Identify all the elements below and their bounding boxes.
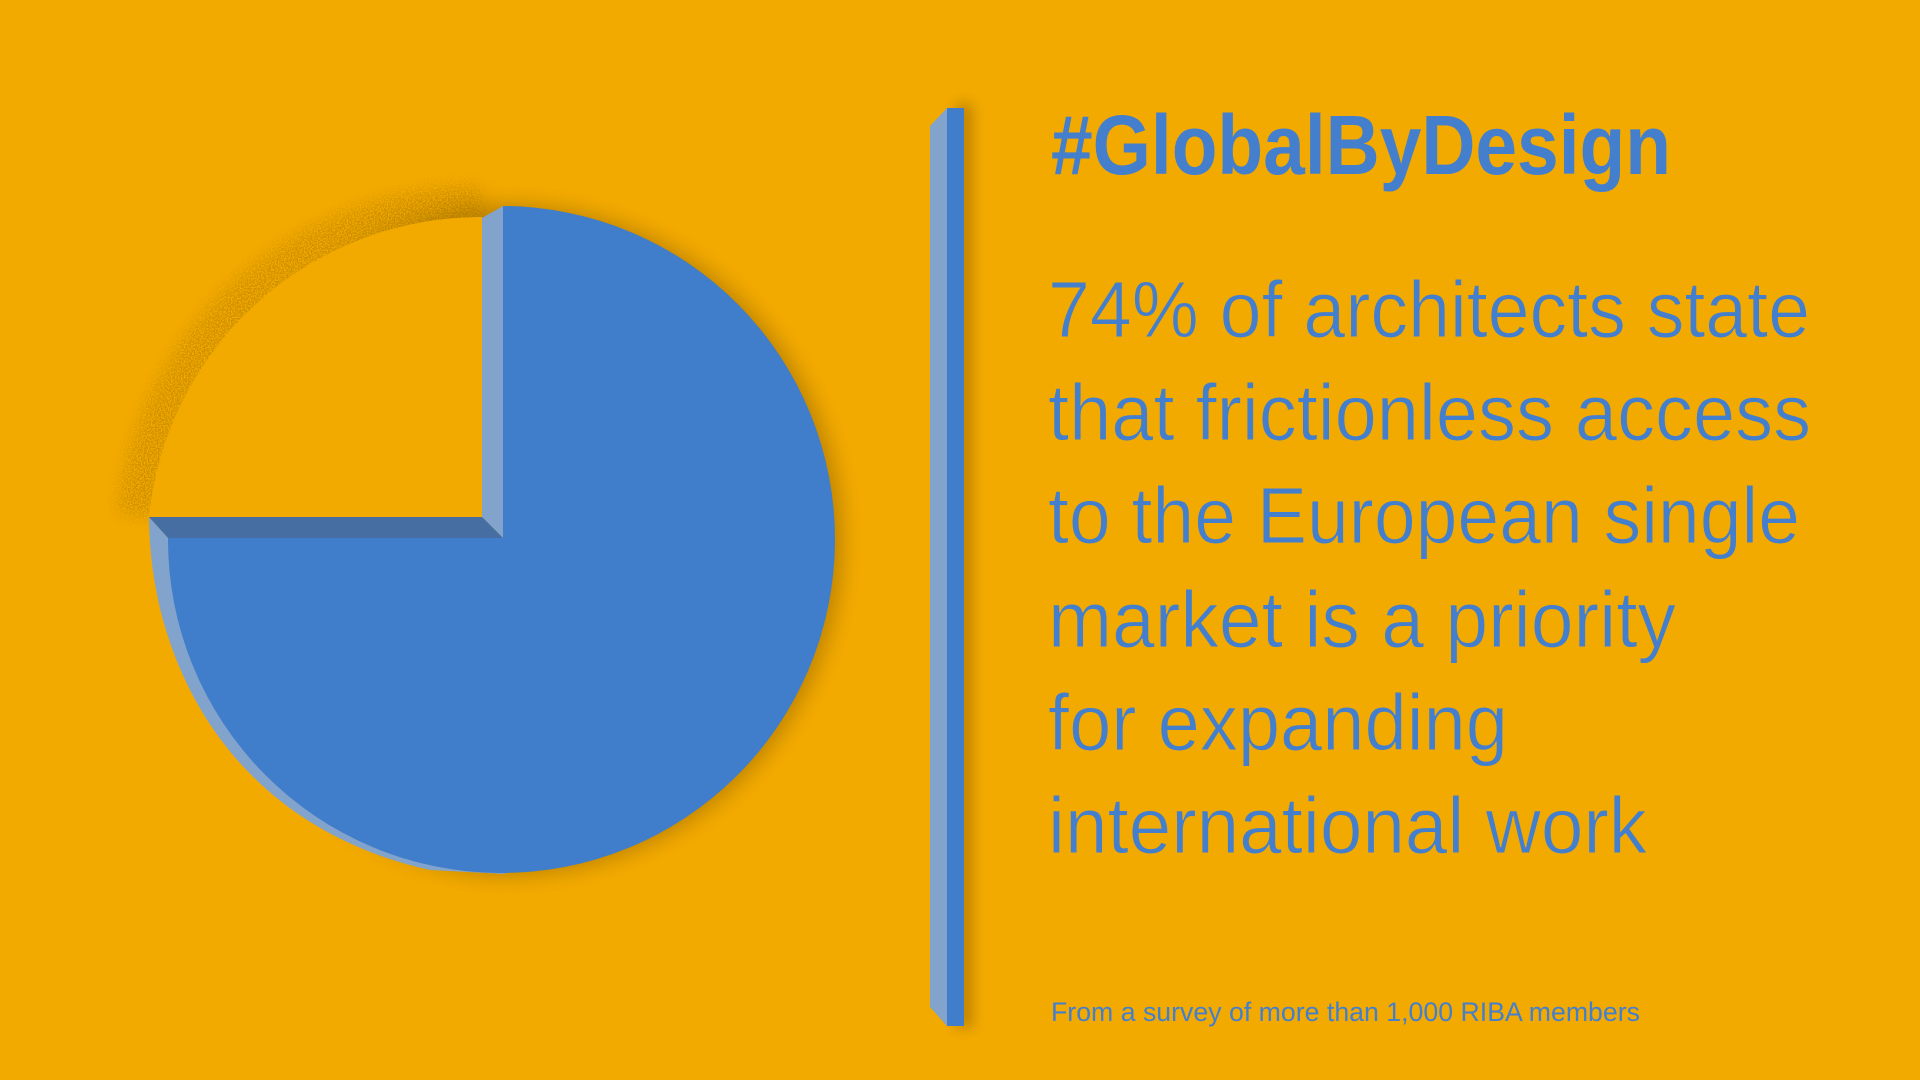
heading: #GlobalByDesign bbox=[1051, 98, 1671, 192]
main statement text: 74% of architects state bbox=[1048, 265, 1810, 354]
pie main face bbox=[168, 206, 835, 873]
pie horizontal inner bevel bbox=[149, 517, 503, 538]
missing slice cut-out bbox=[149, 217, 482, 517]
divider front face bbox=[947, 108, 964, 1026]
main statement text bbox=[1048, 265, 1811, 870]
3D pie chart: 74 percent bbox=[140, 205, 842, 875]
pie vertical inner bevel bbox=[482, 206, 503, 538]
divider shadow bbox=[956, 104, 972, 1028]
grainy shadow around missing slice bbox=[140, 208, 482, 517]
source footnote: From a survey of more than 1,000 RIBA members bbox=[1051, 997, 1640, 1027]
pie lower-left extruded edge bbox=[149, 517, 505, 874]
divider light bevel bbox=[930, 108, 947, 1026]
main statement text: market is a priority bbox=[1048, 575, 1676, 664]
main statement text: international work bbox=[1048, 781, 1648, 870]
main statement text: to the European single bbox=[1048, 471, 1800, 560]
pie drop shadow bbox=[172, 205, 842, 875]
main statement text: for expanding bbox=[1048, 678, 1508, 767]
main statement text: that frictionless access bbox=[1048, 368, 1811, 457]
vertical divider bar bbox=[930, 104, 972, 1028]
